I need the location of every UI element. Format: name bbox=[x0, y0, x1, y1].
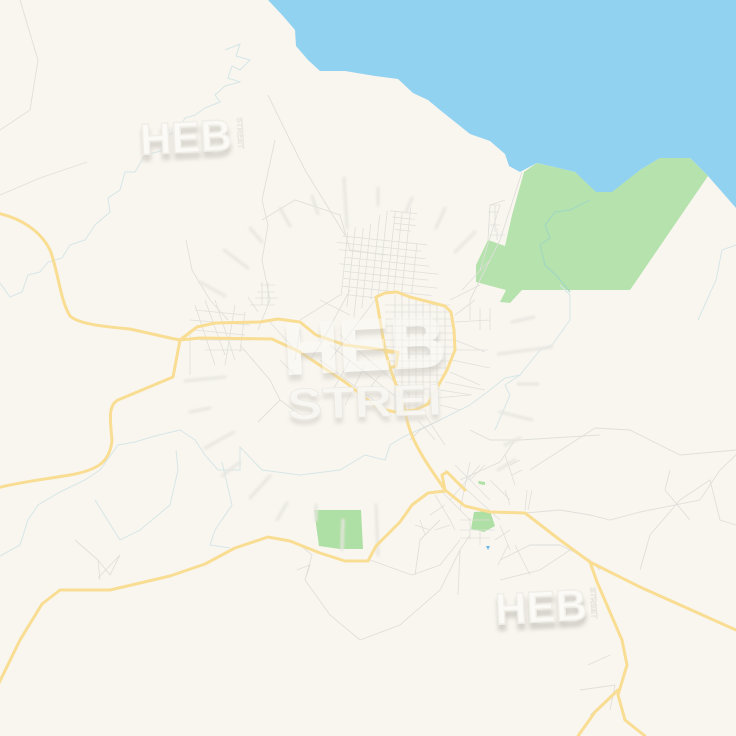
watermark: STREET centre: STREI bbox=[286, 380, 443, 435]
road: centre link bbox=[385, 352, 398, 368]
watermark: HEB top left: HEB bbox=[139, 111, 233, 165]
road: south trunk bbox=[405, 410, 736, 630]
major roads bbox=[0, 213, 736, 736]
green area: small park bbox=[478, 481, 485, 485]
watermark: HEB top left: STREET bbox=[235, 117, 246, 149]
label shadows: radial street name marks bbox=[185, 178, 552, 555]
watermark: STREET centre: STREI bbox=[286, 375, 443, 430]
road: town loop bbox=[442, 472, 465, 490]
road: town north branch bbox=[180, 319, 396, 352]
watermark: HEB bottom right: HEB bbox=[494, 587, 589, 640]
rivers bbox=[0, 44, 736, 556]
green area: park bbox=[314, 510, 363, 549]
watermark: HEB bottom right: HEB bbox=[494, 581, 588, 634]
road: south-west branch bbox=[0, 340, 180, 488]
street grids: city and suburbs bbox=[190, 201, 532, 575]
water: pond bbox=[486, 546, 490, 550]
watermark: HEB top left: HEB bbox=[139, 117, 233, 171]
road: long southern highway bbox=[0, 491, 445, 685]
water: sea bbox=[268, 0, 736, 208]
road: southern branch bbox=[590, 562, 645, 736]
watermark: HEB centre: HEB bbox=[281, 302, 447, 390]
road: fork south bbox=[578, 690, 618, 736]
watermark: HEB bottom right: STREET bbox=[588, 587, 599, 619]
road: west highway bbox=[0, 213, 180, 340]
watermark: HEB centre: HEB bbox=[282, 308, 448, 396]
road: town south branch bbox=[180, 292, 455, 412]
green area: town park bbox=[471, 511, 495, 532]
river inside reserve bbox=[540, 200, 590, 292]
green area: coastal reserve bbox=[476, 158, 708, 303]
